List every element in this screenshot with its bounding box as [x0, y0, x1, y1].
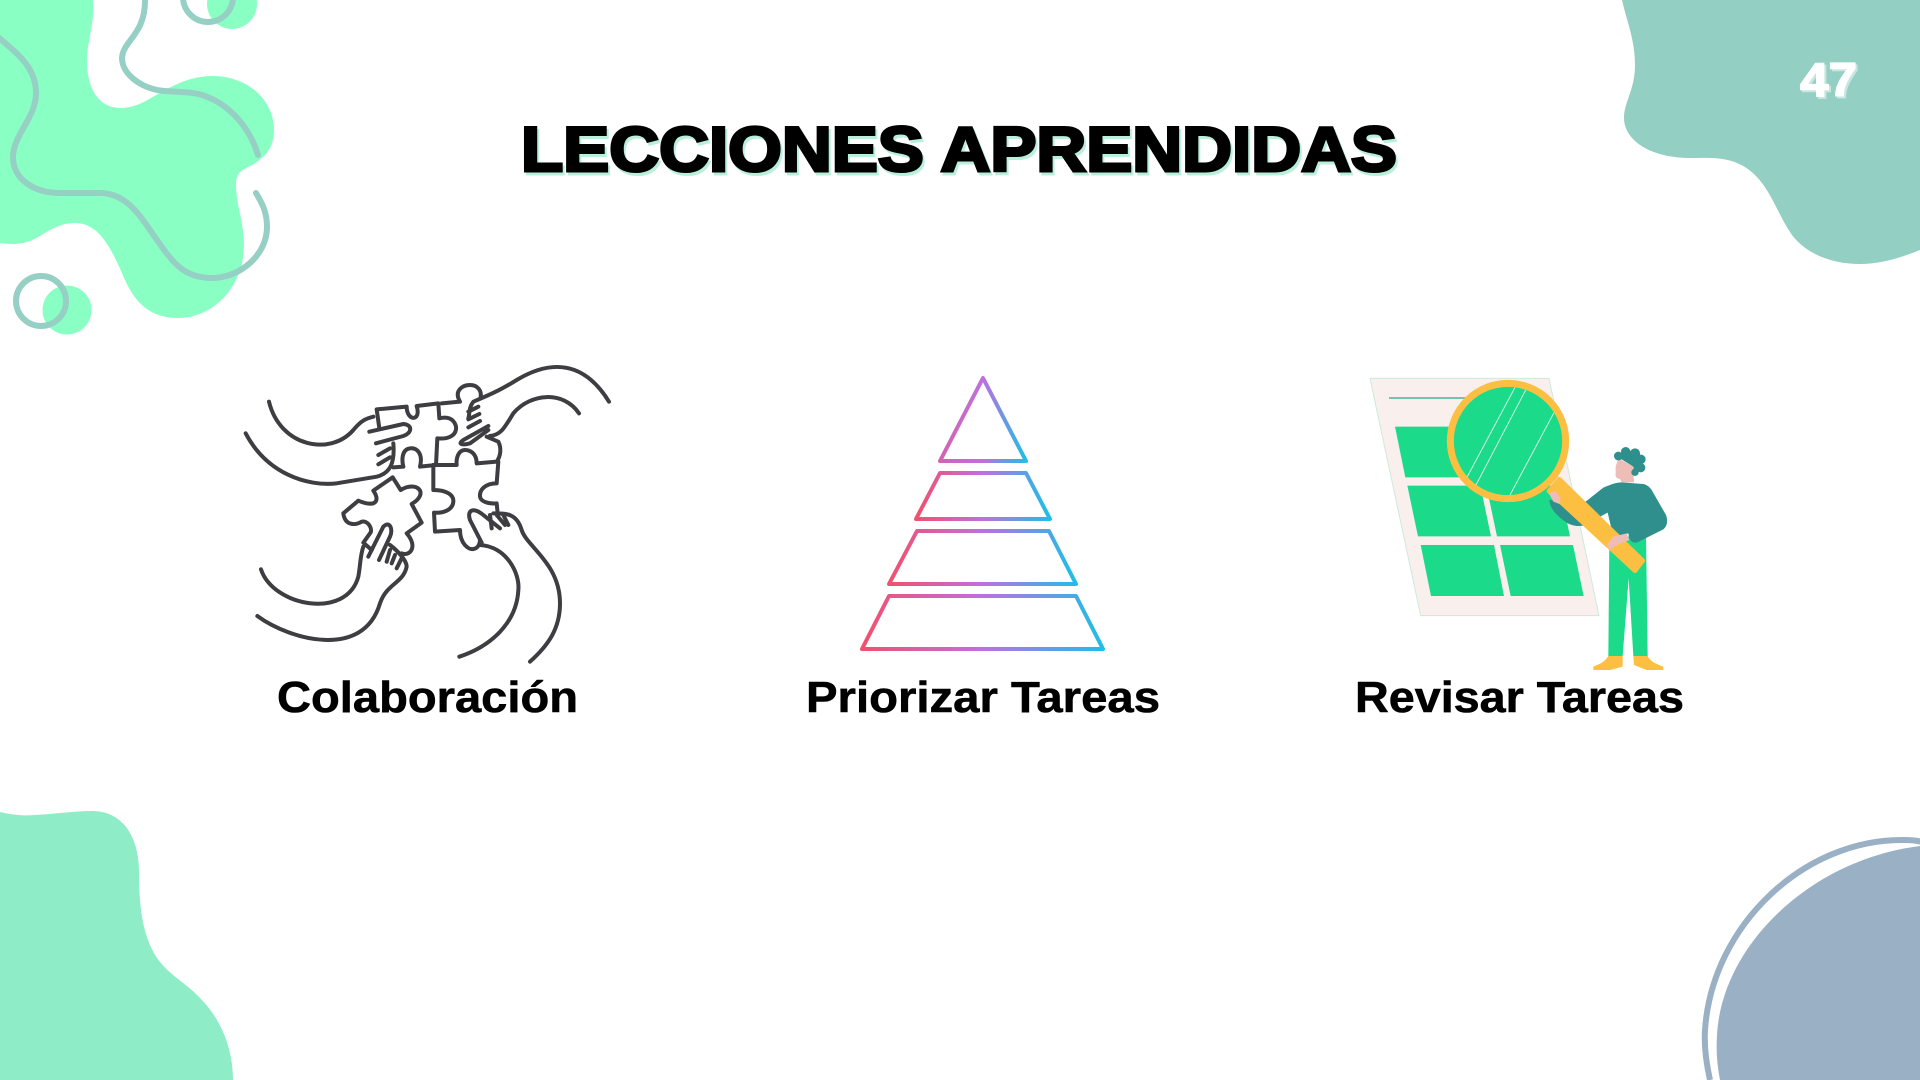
pyramid level 2 [916, 473, 1050, 519]
puzzle piece: bottom right [433, 462, 498, 549]
icon: gradient pyramid [862, 378, 1103, 649]
document [1370, 378, 1599, 616]
icon: hands joining puzzle pieces [246, 367, 609, 662]
label: Priorizar Tareas: Priorizar Tareas [806, 673, 1160, 722]
hand: left [246, 402, 410, 484]
hand: top right [461, 367, 609, 444]
page number: 47 [1802, 55, 1859, 108]
puzzle piece: top left [377, 403, 456, 467]
decoration: bottom-right blue circle with ring [1705, 840, 1920, 1080]
puzzle piece: top right [433, 385, 500, 465]
hand: bottom left [257, 524, 407, 640]
pyramid level 3 [889, 531, 1076, 584]
magnifying glass [1450, 383, 1643, 571]
person [1549, 447, 1667, 670]
label: Colaboración: Colaboración [277, 673, 578, 722]
hands [1549, 491, 1629, 550]
pyramid level 4 [862, 596, 1103, 649]
icon: person inspecting a document with a magnifier [1370, 378, 1667, 670]
page number: 47 [1800, 53, 1857, 106]
puzzle piece: bottom left [343, 477, 422, 554]
title: LECCIONES APRENDIDAS [523, 118, 1399, 188]
label: Revisar Tareas: Revisar Tareas [1355, 673, 1684, 722]
decoration: top-left green blob with curves and circles [0, 0, 274, 334]
pyramid level 1 [940, 378, 1026, 461]
title: LECCIONES APRENDIDAS [521, 115, 1397, 185]
hand: bottom right [459, 510, 560, 662]
decoration: top-right teal blob [1622, 0, 1920, 264]
decoration: bottom-left green blob [0, 811, 233, 1080]
